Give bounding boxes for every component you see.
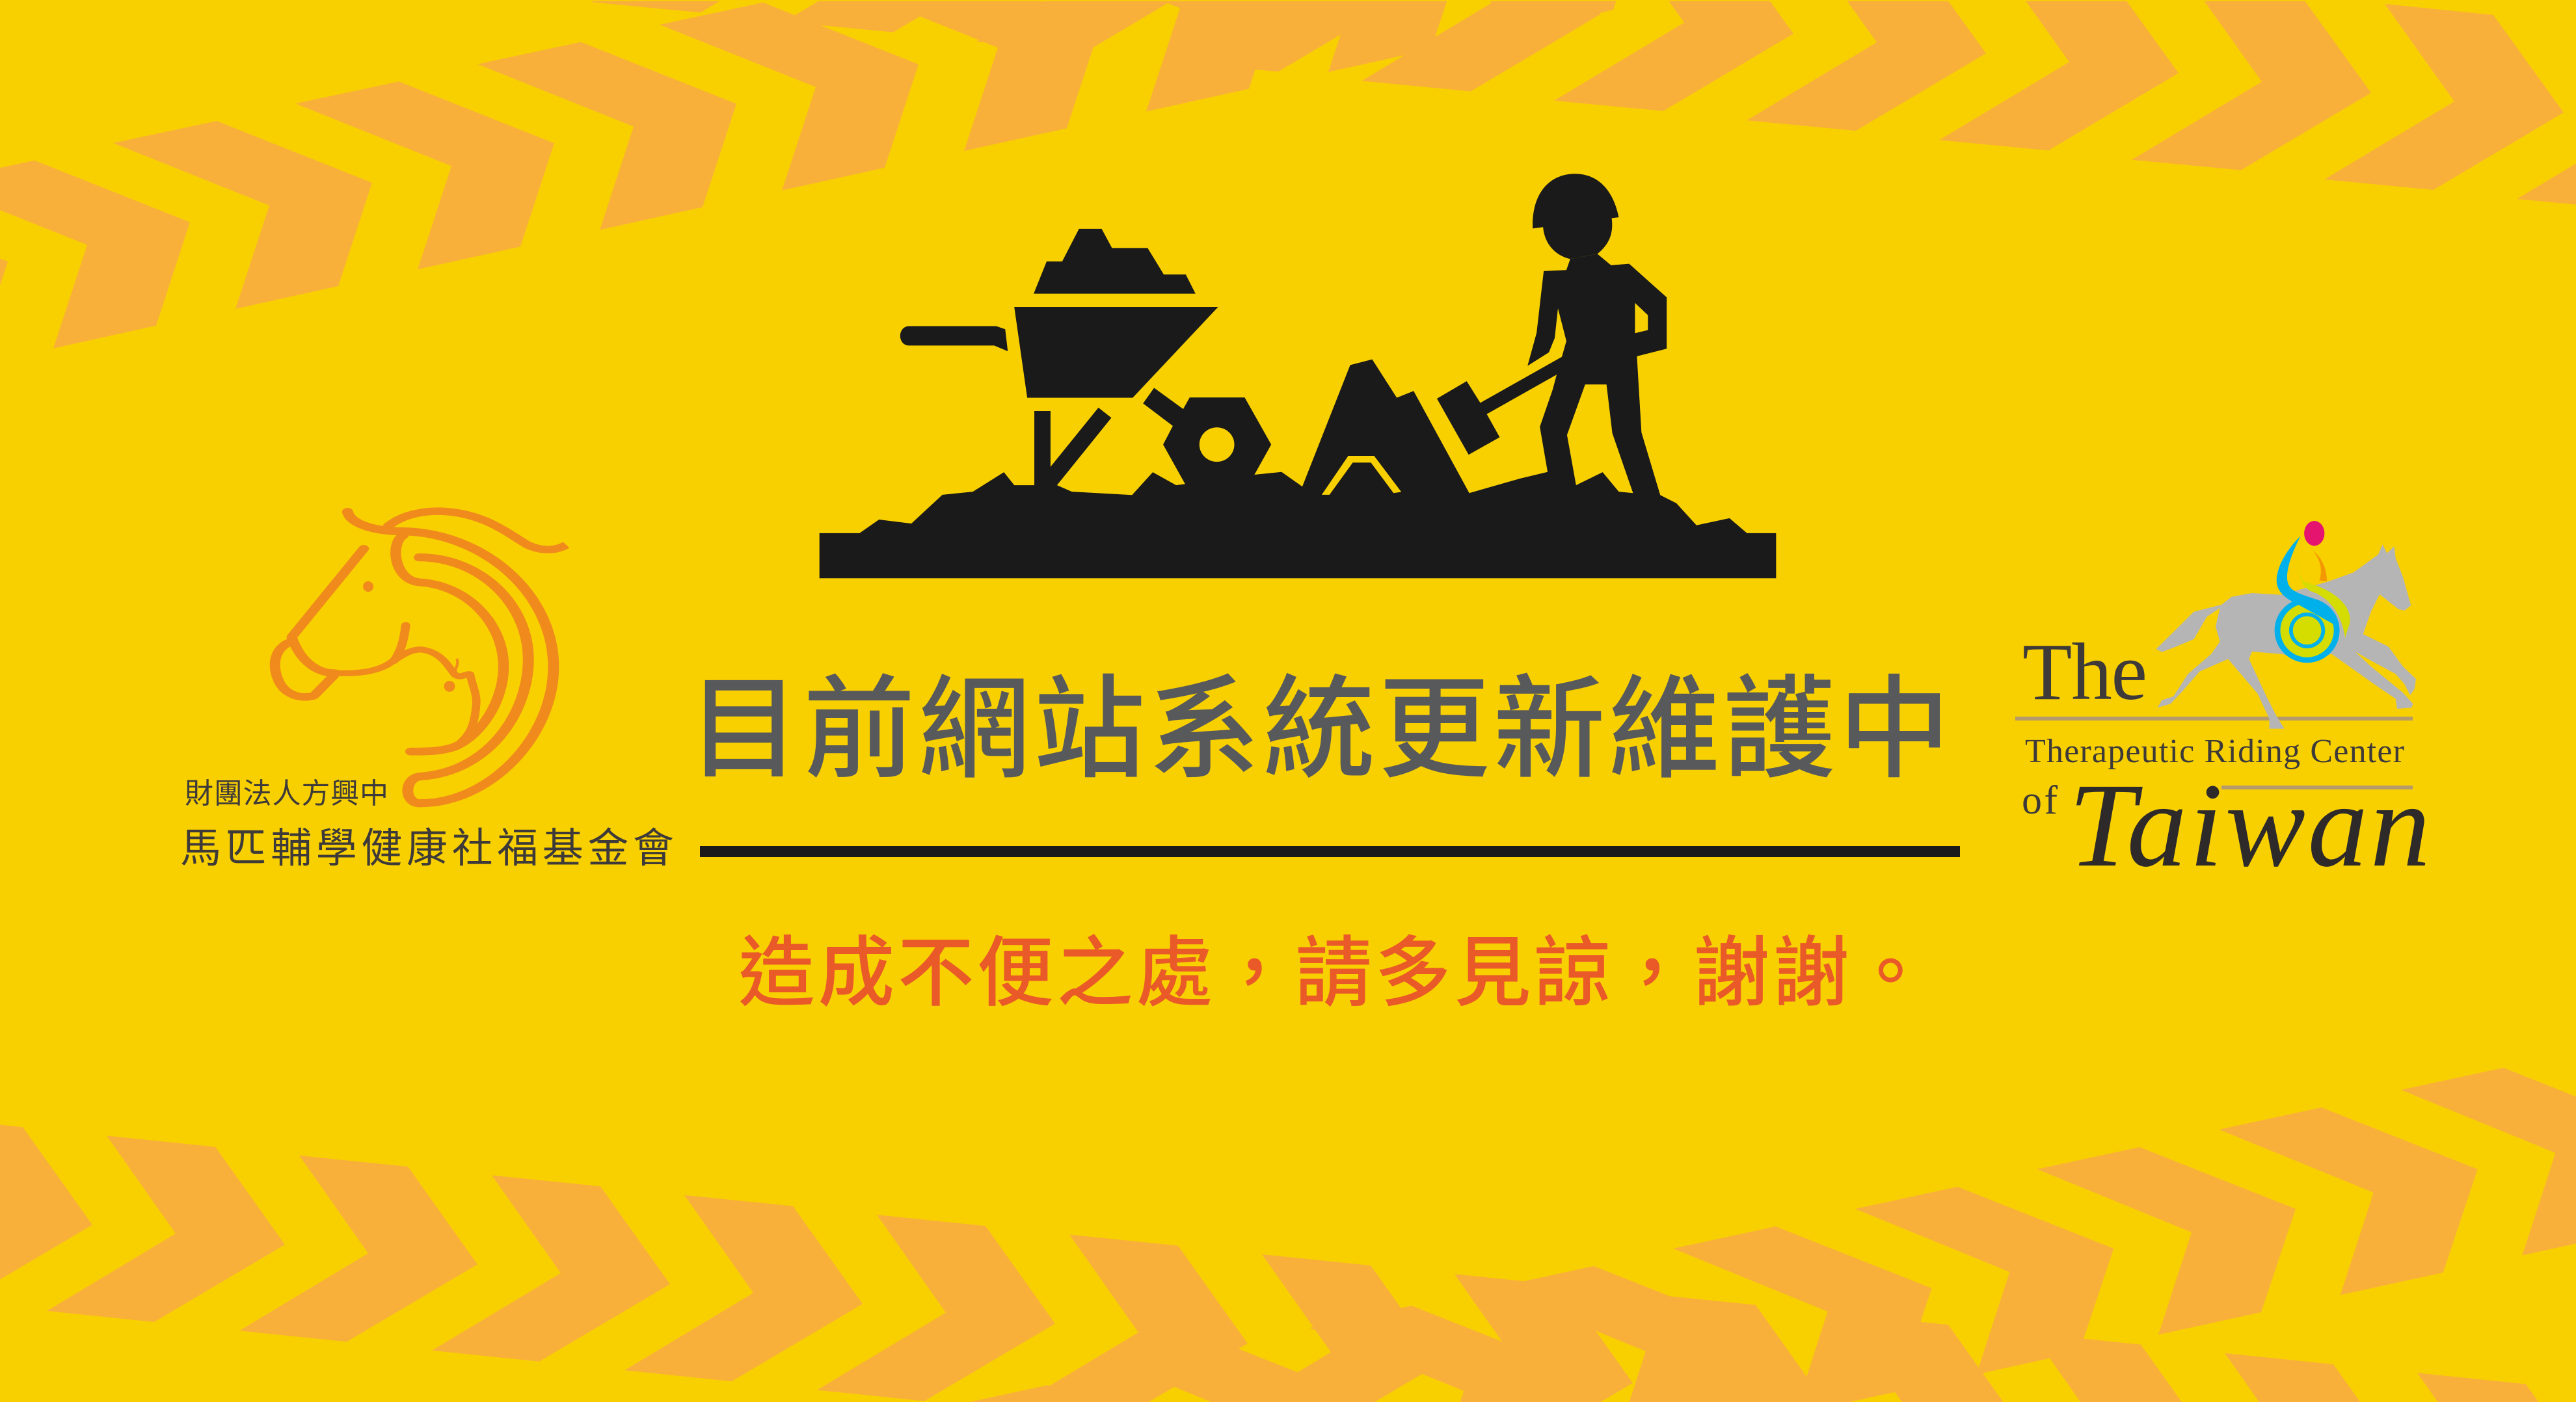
wheelbarrow handle (900, 326, 1008, 351)
divider (700, 846, 1960, 857)
chevron band: top (0, 0, 2576, 388)
gap in rock pile (1322, 456, 1401, 495)
neck arc (396, 535, 503, 752)
mane wave (386, 511, 566, 549)
wordmark: The: The (2022, 628, 2147, 717)
rider lime body (2297, 551, 2350, 639)
horse and rider (2156, 521, 2416, 729)
wheelbarrow bucket (1014, 307, 1218, 398)
gap under arm (1635, 303, 1648, 333)
gap between legs (1567, 384, 1633, 493)
rider rings (2275, 598, 2340, 663)
outer and middle arcs (347, 512, 554, 803)
horse eye (363, 581, 373, 592)
logo: horse and dog foundation mark (275, 511, 566, 803)
dog profile and horse jaw (335, 650, 476, 747)
subtitle: 造成不便之處，請多見諒，謝謝。 (738, 910, 1929, 1022)
dirt load (1034, 229, 1196, 294)
ground, cart legs, gear, rock pile and worker body (820, 254, 1776, 578)
rider orange arm (2313, 551, 2327, 581)
ear tuft (455, 659, 457, 673)
lower lip (275, 642, 334, 697)
chevron band: bottom (0, 1068, 2576, 1402)
hole in gear (1200, 427, 1234, 462)
worker head and helmet (1533, 174, 1619, 259)
top edge line (0, 0, 2576, 1)
wordmark: of: of (2022, 778, 2058, 823)
rules (2015, 717, 2413, 721)
title: 目前網站系統更新維護中 (688, 667, 1950, 792)
logo: therapeutic riding center (2015, 521, 2430, 892)
horse (2156, 544, 2416, 729)
cheek (394, 626, 406, 661)
wordmark: Taiwan: Taiwan (2069, 759, 2430, 892)
rider blue body (2277, 536, 2338, 627)
horse face and muzzle (292, 549, 364, 673)
rider head (2304, 521, 2324, 546)
foundation name large: 馬匹輔學健康社福基金會 (180, 826, 674, 871)
dog eye (444, 681, 455, 692)
wordmark: Therapeutic Riding Center: Therapeutic Riding Center (2025, 733, 2404, 770)
foundation name small: 財團法人方興中 (185, 778, 388, 810)
icon: construction worker with wheelbarrow (820, 174, 1776, 578)
